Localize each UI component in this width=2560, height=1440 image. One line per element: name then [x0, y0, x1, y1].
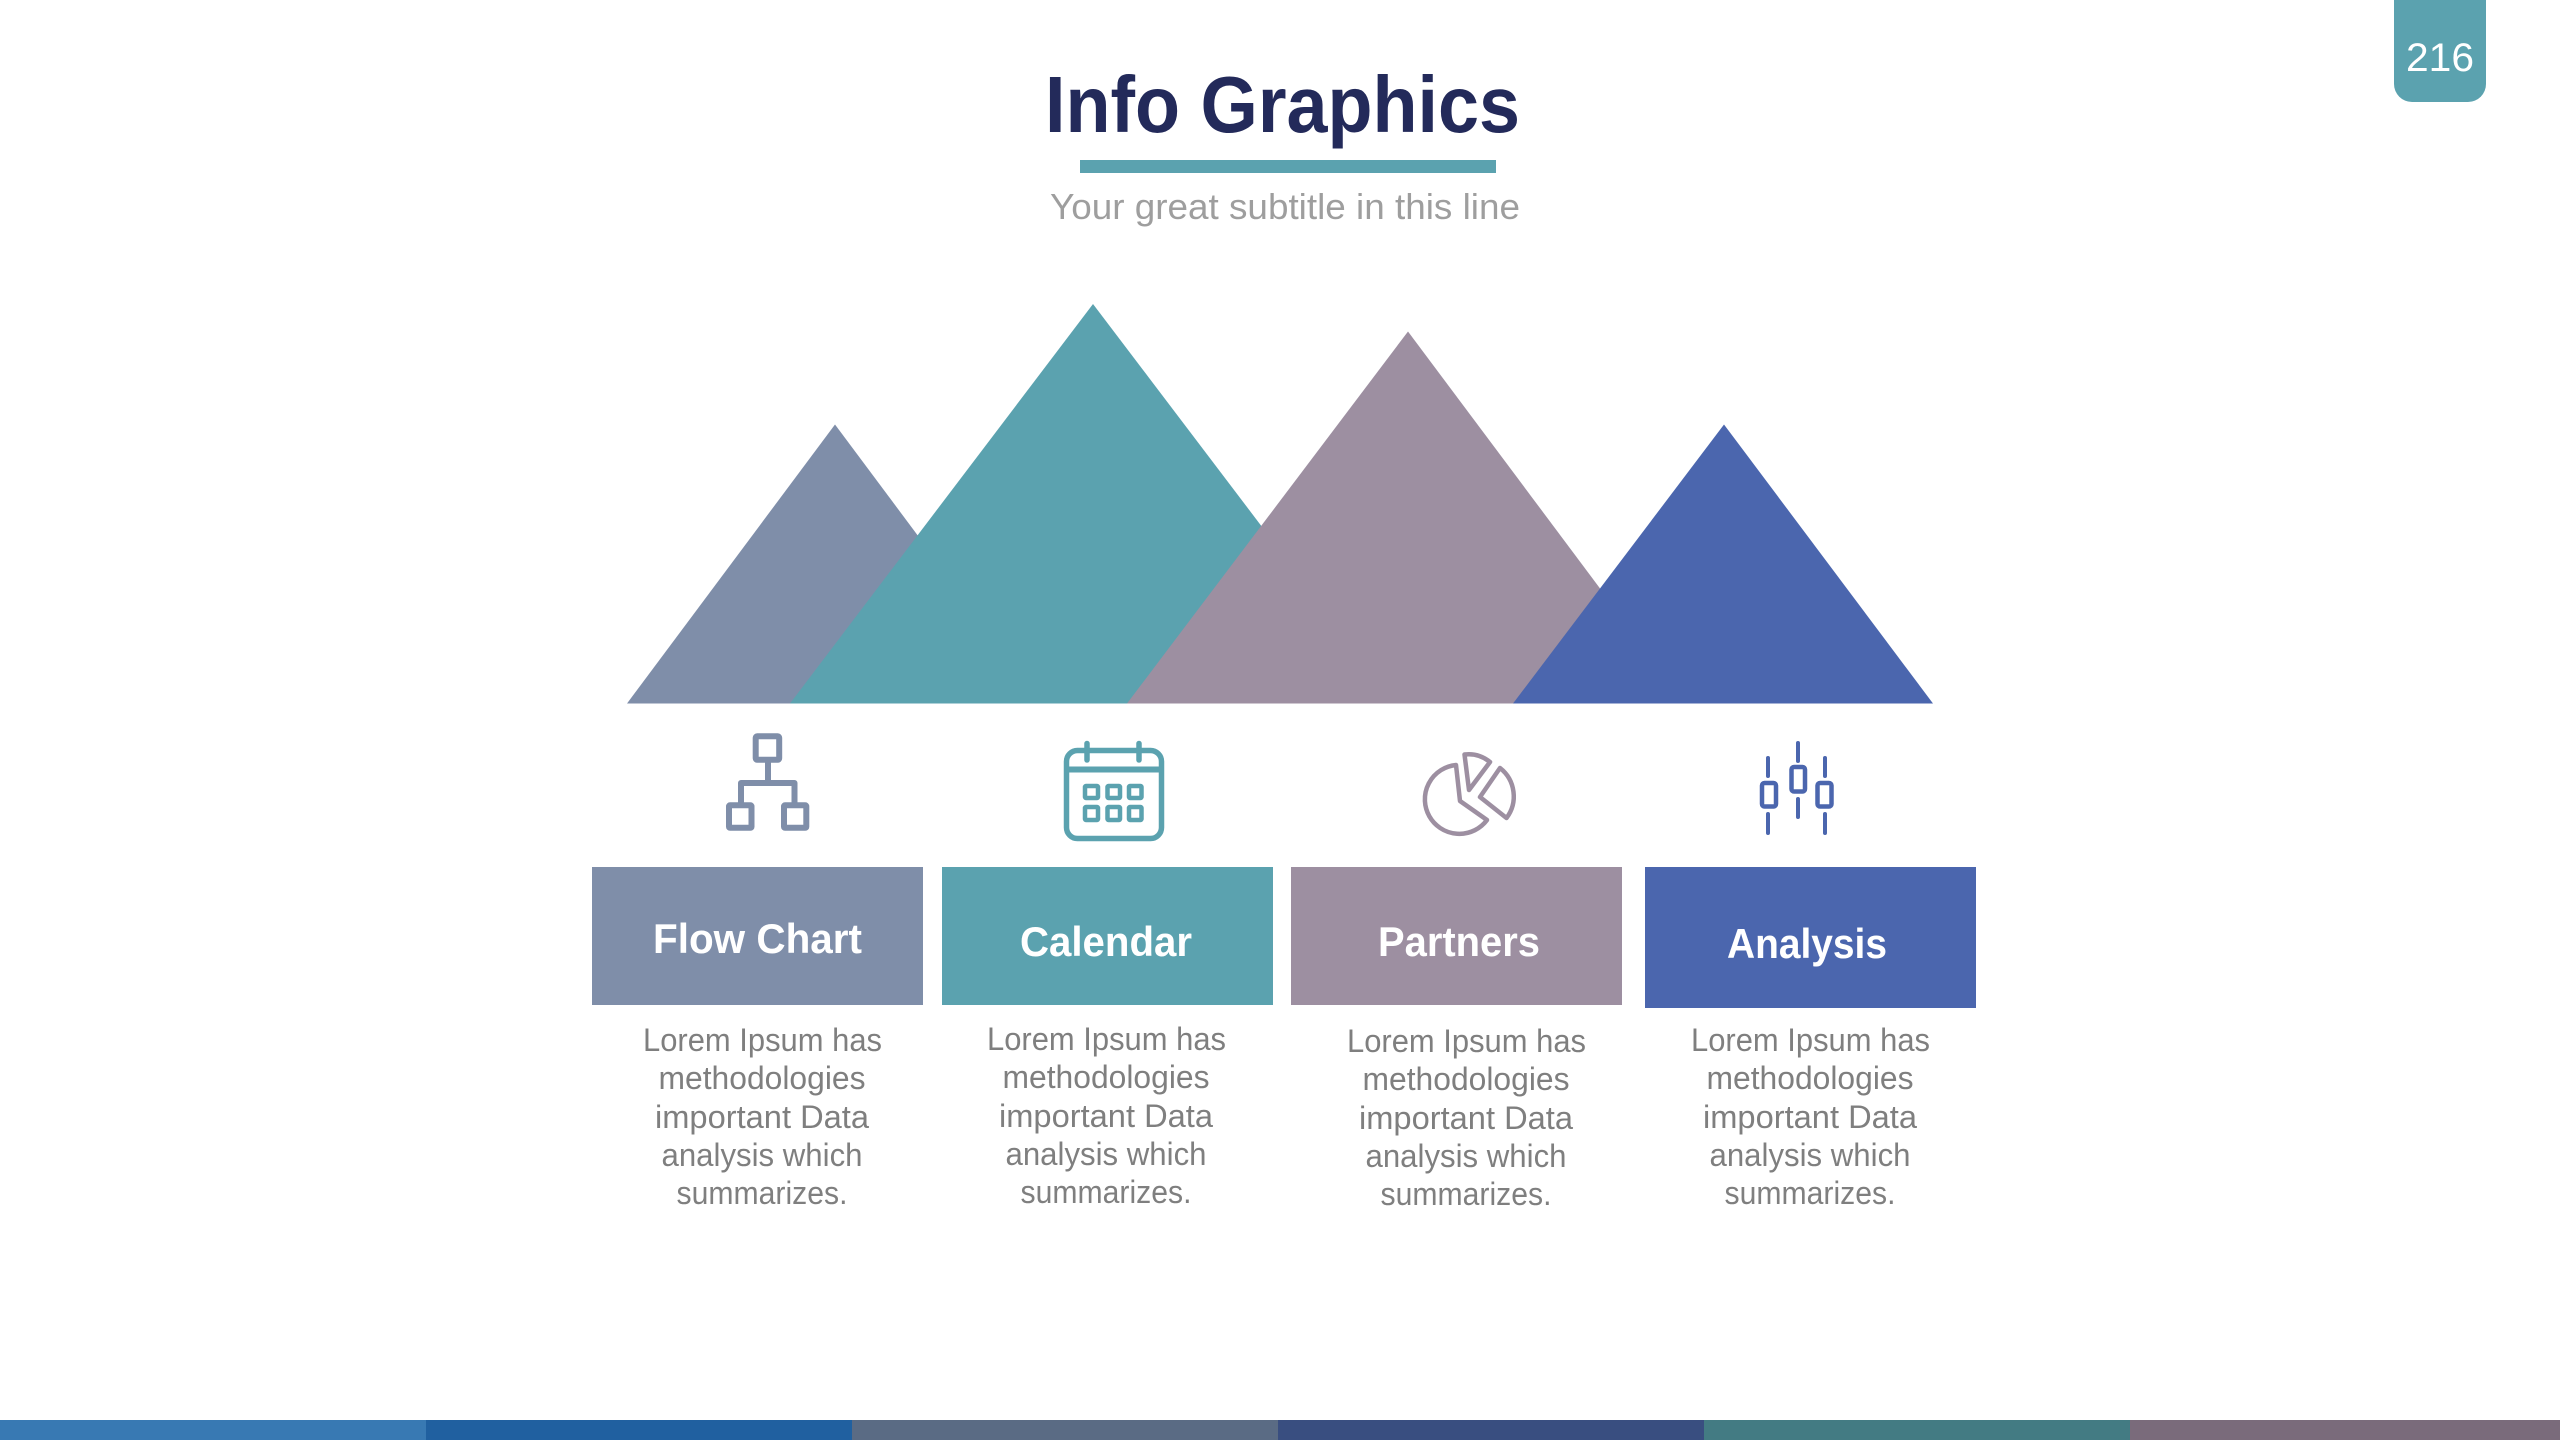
- icon: pie chart: [1425, 754, 1514, 834]
- subtitle: Your great subtitle in this line: [1050, 186, 1520, 227]
- text block: calendar description: summarizes.: [1020, 1174, 1192, 1210]
- text block: analysis description: analysis which: [1710, 1137, 1910, 1173]
- text block: analysis description: Lorem Ipsum has: [1691, 1022, 1930, 1058]
- triangle: analysis: [1513, 424, 1933, 704]
- label box: flow chart: [592, 867, 923, 1005]
- text block: flow chart description: methodologies: [658, 1060, 866, 1096]
- text block: partners description: [1347, 1023, 1586, 1212]
- icon: calendar: [1066, 744, 1162, 838]
- text block: flow chart description: summarizes.: [676, 1175, 848, 1211]
- text block: calendar description: important Data: [999, 1098, 1213, 1134]
- text block: calendar description: [987, 1021, 1226, 1210]
- label box: analysis: Analysis: [1727, 920, 1887, 967]
- text block: calendar description: Lorem Ipsum has: [987, 1021, 1226, 1057]
- text block: calendar description: methodologies: [1002, 1059, 1210, 1095]
- text block: partners description: summarizes.: [1380, 1176, 1552, 1212]
- text block: analysis description: summarizes.: [1724, 1175, 1896, 1211]
- text block: flow chart description: [643, 1022, 882, 1211]
- triangle: flow chart: [627, 424, 1043, 704]
- text block: analysis description: important Data: [1703, 1099, 1917, 1135]
- label box: flow chart: Flow Chart: [653, 915, 862, 962]
- triangle: partners: [1127, 332, 1686, 704]
- text block: flow chart description: important Data: [655, 1099, 869, 1135]
- label box: partners: Partners: [1378, 918, 1540, 965]
- title: Info Graphics: [1045, 60, 1520, 149]
- label box: partners: [1291, 867, 1622, 1005]
- mountain triangles chart: [627, 304, 1933, 704]
- title underline: [1080, 160, 1496, 173]
- icon: analysis sliders: [1762, 743, 1832, 833]
- label box: calendar: Calendar: [1020, 918, 1192, 965]
- triangle: calendar: [790, 304, 1396, 704]
- icon: flow chart: [729, 736, 806, 828]
- text block: calendar description: analysis which: [1006, 1136, 1206, 1172]
- text block: analysis description: methodologies: [1706, 1060, 1914, 1096]
- text block: analysis description: [1691, 1022, 1930, 1211]
- text block: flow chart description: Lorem Ipsum has: [643, 1022, 882, 1058]
- text block: partners description: important Data: [1359, 1100, 1573, 1136]
- text block: partners description: methodologies: [1362, 1061, 1570, 1097]
- footer colour bar: [0, 1420, 2560, 1440]
- text block: partners description: Lorem Ipsum has: [1347, 1023, 1586, 1059]
- page number tab: 216: [2406, 36, 2474, 80]
- text block: flow chart description: analysis which: [662, 1137, 862, 1173]
- label box: analysis: [1645, 867, 1976, 1008]
- text block: partners description: analysis which: [1366, 1138, 1566, 1174]
- page number tab: [2394, 0, 2486, 102]
- label box: calendar: [942, 867, 1273, 1005]
